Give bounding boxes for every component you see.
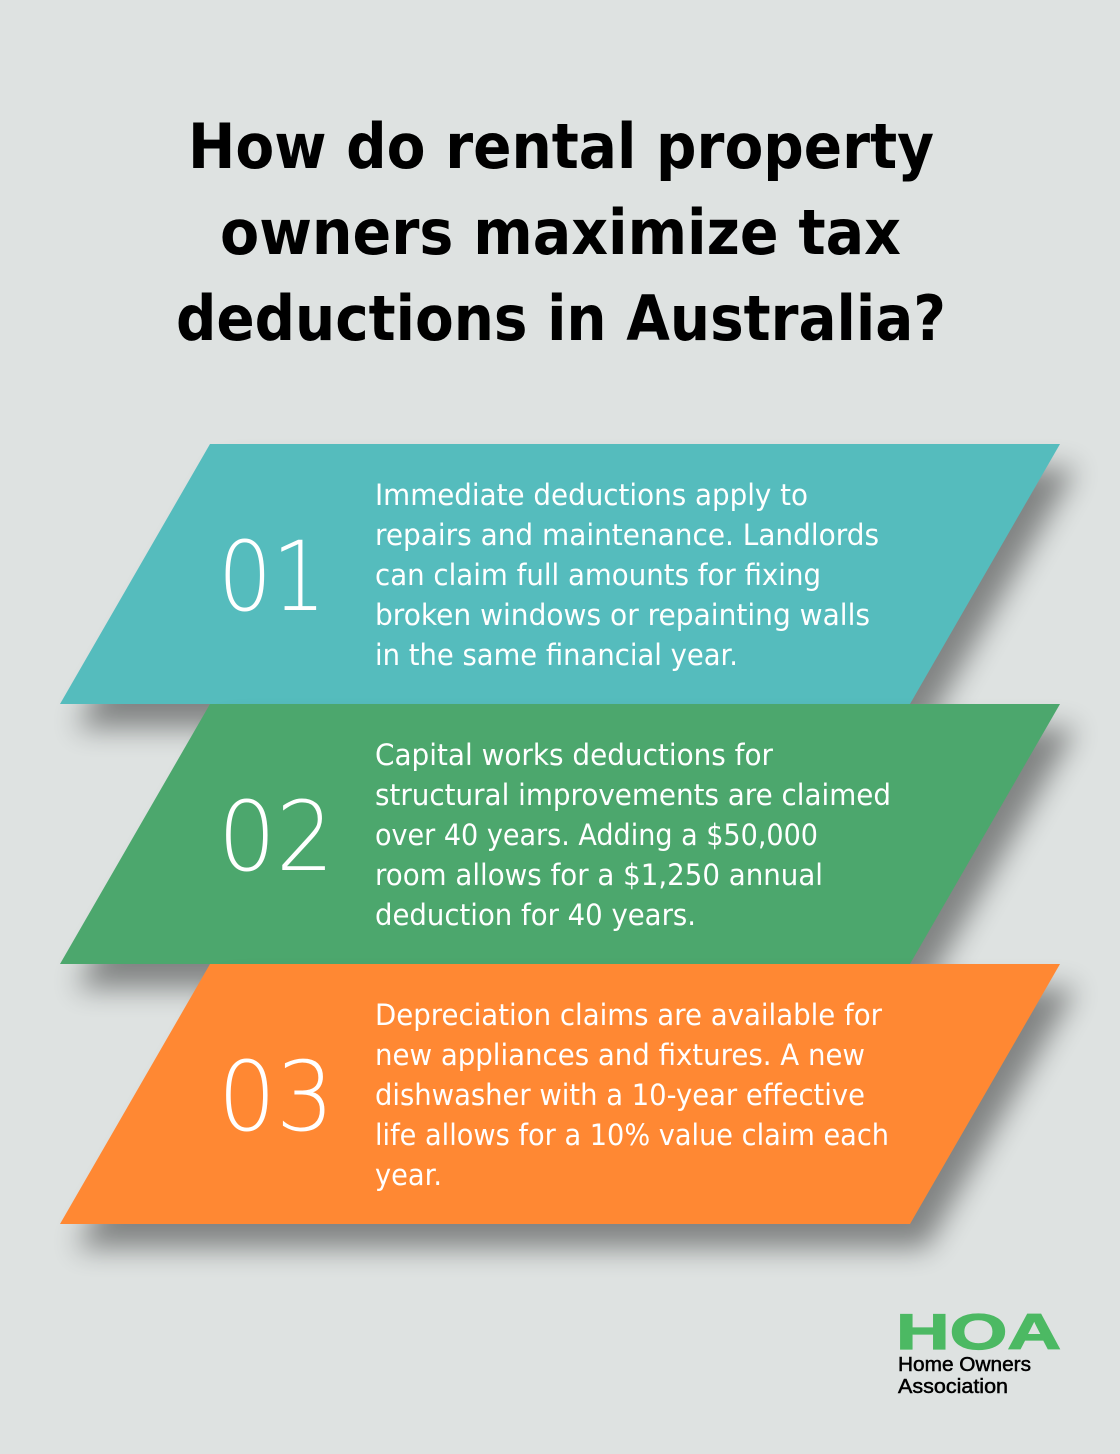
title: deductions in Australia? bbox=[176, 282, 946, 355]
description 03: year. bbox=[375, 1158, 442, 1192]
title: How do rental property bbox=[188, 110, 934, 183]
teal parallelogram bbox=[60, 444, 1060, 704]
description 03: new appliances and fixtures. A new bbox=[375, 1038, 865, 1072]
title bbox=[176, 110, 946, 355]
logo mark HOA: HOA bbox=[896, 1304, 1061, 1360]
number 01: 01 bbox=[218, 521, 326, 633]
panel: step 01 repairs and maintenance bbox=[60, 444, 1060, 704]
description 01: repairs and maintenance. Landlords bbox=[375, 518, 879, 552]
logo wordmark: Home Owners bbox=[898, 1354, 1031, 1376]
description 03: Depreciation claims are available for bbox=[375, 998, 882, 1032]
description 02: deduction for 40 years. bbox=[375, 898, 696, 932]
description 01: can claim full amounts for fixing bbox=[375, 558, 821, 592]
panel: step 03 depreciation bbox=[60, 964, 1060, 1224]
description 01: in the same financial year. bbox=[375, 638, 738, 672]
description 02: Capital works deductions for bbox=[375, 738, 773, 772]
description 03 bbox=[375, 998, 889, 1192]
description 02 bbox=[375, 738, 891, 932]
logo wordmark bbox=[898, 1354, 1031, 1398]
description 01: Immediate deductions apply to bbox=[375, 478, 808, 512]
description 03: life allows for a 10% value claim each bbox=[375, 1118, 889, 1152]
logo: Home Owners Association bbox=[896, 1304, 1061, 1398]
logo wordmark: Association bbox=[898, 1376, 1008, 1398]
description 01 bbox=[375, 478, 879, 672]
orange parallelogram bbox=[60, 964, 1060, 1224]
number 03: 03 bbox=[218, 1041, 334, 1153]
description 03: dishwasher with a 10-year effective bbox=[375, 1078, 865, 1112]
number 02: 02 bbox=[218, 781, 334, 893]
panel: step 02 capital works bbox=[60, 704, 1060, 964]
description 02: room allows for a $1,250 annual bbox=[375, 858, 823, 892]
green parallelogram bbox=[60, 704, 1060, 964]
description 02: over 40 years. Adding a $50,000 bbox=[375, 818, 818, 852]
description 01: broken windows or repainting walls bbox=[375, 598, 870, 632]
title: owners maximize tax bbox=[220, 196, 901, 269]
description 02: structural improvements are claimed bbox=[375, 778, 891, 812]
